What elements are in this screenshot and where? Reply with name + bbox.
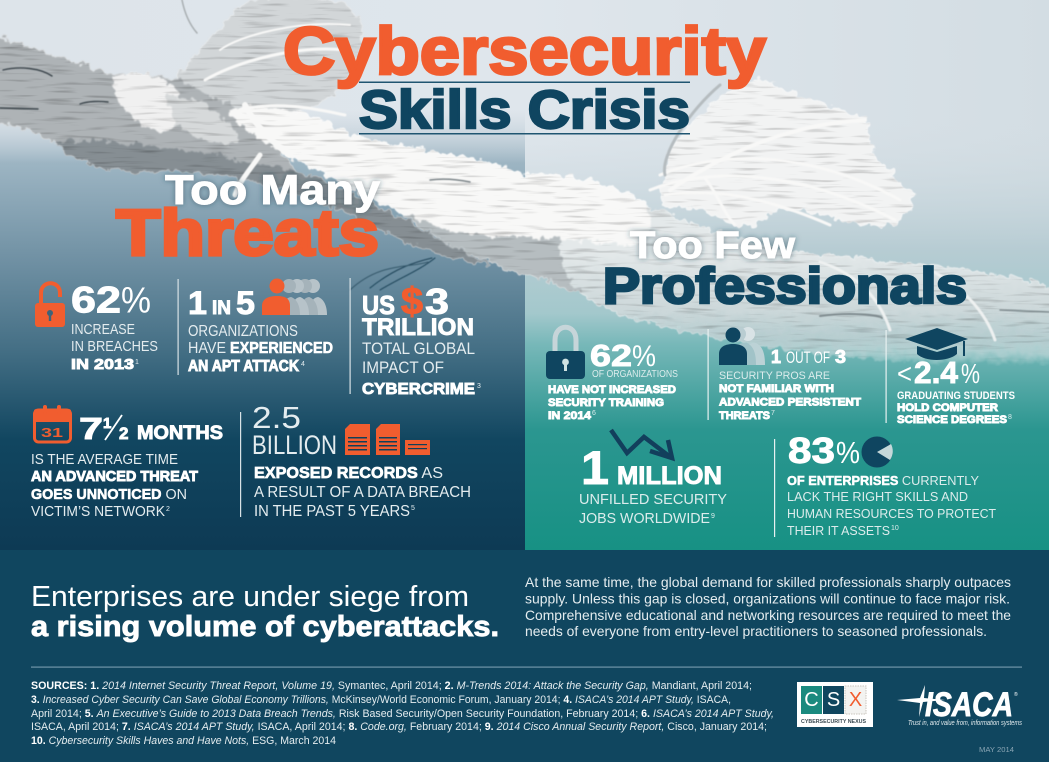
stat: 7 1/2 months: IS THE AVERAGE TIME (31, 451, 178, 468)
stat: 83% of enterprises: LACK THE RIGHT SKILLS AND (787, 489, 968, 504)
logo: ISACA: ISACA (925, 686, 1013, 724)
stat: 7 1/2 months: AN ADVANCED THREAT (31, 468, 198, 485)
stat: 7 1/2 months: GOES UNNOTICED ON (31, 486, 187, 503)
stat: 62% increase in breaches: % (121, 280, 151, 320)
heading: Too Few Professionals: Too Few (630, 225, 795, 267)
icon: document records (345, 424, 430, 455)
bottom band (0, 550, 1049, 762)
icon: closed padlock (546, 327, 585, 379)
stat: 62% increase in breaches: INCREASE (71, 321, 135, 338)
stat: 83% of enterprises: % (836, 435, 860, 470)
stat: 1 out of 3 security pros: NOT FAMILIAR WITH (719, 383, 834, 395)
headline: enterprises under siege: a rising volume of cyberattacks. (31, 611, 499, 643)
stat: under 2.4% graduating students: 2.4 (914, 355, 959, 390)
stat: US $3 trillion: CYBERCRIME (362, 381, 475, 398)
stat: 7 1/2 months: 7 (79, 411, 103, 446)
stat: 83% of enterprises: THEIR IT ASSETS (787, 523, 890, 538)
logo: CSX Cybersecurity Nexus: X (849, 689, 862, 711)
stat: 1 out of 3 security pros: OUT OF (786, 348, 830, 367)
icon: pie chart (862, 436, 893, 468)
icon: falling arrow (611, 430, 672, 458)
stat: 83% of enterprises: HUMAN RESOURCES TO PROTECT (787, 506, 996, 521)
icon: people (719, 327, 765, 365)
stat: US $3 trillion: $ (401, 281, 423, 323)
stat: US $3 trillion: TOTAL GLOBAL (362, 339, 475, 358)
date: MAY 2014 (979, 745, 1014, 754)
paragraph: global demand (525, 574, 1011, 639)
stat: 1 in 5 organizations: AN APT ATTACK (188, 358, 300, 375)
stat: under 2.4% graduating students: 8 (1008, 414, 1012, 421)
background: right professionals panel (525, 120, 1049, 550)
stat: US $3 trillion: US (362, 290, 395, 320)
stat: 2.5 billion exposed records: A RESULT OF A DATA BREACH (254, 484, 471, 501)
stat: 1 out of 3 security pros: SECURITY PROS ARE (719, 370, 830, 382)
title line: Skills Crisis: Skills Crisis (359, 80, 690, 140)
stat: US $3 trillion: TRILLION (362, 314, 474, 341)
stat: 1 in 5 organizations: HAVE EXPERIENCED (188, 340, 333, 357)
heading: Too Many Threats (116, 166, 381, 269)
stat: 62% of organizations: % (632, 340, 656, 373)
stat: 1 out of 3 security pros: 3 (835, 347, 846, 367)
title (283, 14, 766, 140)
stat: 1 out of 3 security pros: 7 (771, 410, 775, 417)
stat: under 2.4% graduating students: SCIENCE DEGREES (897, 414, 1007, 426)
stat: US $3 trillion (362, 281, 481, 398)
heading: Too Few Professionals: Professionals (603, 258, 967, 314)
stat: 83% of enterprises: OF ENTERPRISES CURRENTLY (787, 473, 979, 488)
stat: 2.5 billion exposed records: IN THE PAST 5 YEARS (254, 503, 410, 520)
stat: US $3 trillion: 3 (425, 281, 449, 322)
logo: ISACA (897, 685, 1022, 727)
sources list: SOURCES: 1. 2014 Internet Security Threat Report, Volume 19, Symantec, April 2014; 2. M-Trends 2014: Attack the Security Gap, Mandiant, April 2014; (31, 680, 752, 692)
stat: 2.5 billion exposed records: 5 (411, 505, 415, 512)
stat: 1 out of 3 security pros: 1 (771, 347, 781, 367)
sources list: 10. Cybersecurity Skills Haves and Have Nots, ESG, March 2014 (31, 735, 336, 747)
stat: 62% of organizations: 62 (590, 338, 632, 373)
stat: 1 in 5 organizations: 5 (236, 285, 255, 321)
heading: Too Many Threats: Threats (116, 196, 379, 269)
icon: open padlock (35, 283, 65, 327)
stat: 7 1/2 months: 1 (103, 415, 111, 432)
stat: 1 million unfilled jobs: MILLION (617, 462, 722, 490)
stat: 62% increase in breaches (35, 280, 158, 373)
logo: CSX Cybersecurity Nexus: S (827, 689, 840, 711)
stat: US $3 trillion: 3 (477, 383, 481, 390)
stat: 2.5 billion exposed records: BILLION (252, 430, 337, 460)
stat: 1 in 5 organizations (188, 278, 333, 375)
title line: Cybersecurity: Cybersecurity (283, 14, 766, 89)
sources list: 3. Increased Cyber Security Can Save Global Economy Trillions, McKinsey/World Economic Forum, January 2014; 4. ISACA’s 2014 APT Study, ISACA, (31, 694, 731, 706)
paragraph: global demand: needs of everyone from entry-level practitioners to seasoned professionals. (525, 623, 987, 639)
stat: 1 in 5 organizations: 1 (188, 285, 207, 321)
logo: CSX Cybersecurity Nexus (797, 682, 873, 727)
stat: 62% of organizations (546, 327, 678, 422)
stat: under 2.4% graduating students (897, 328, 1015, 426)
stat: 2.5 billion exposed records: EXPOSED RECORDS AS (254, 465, 443, 482)
logo: CSX Cybersecurity Nexus: CYBERSECURITY NEXUS (801, 719, 866, 725)
stat: 62% of organizations: OF ORGANIZATIONS (592, 369, 678, 380)
stat: 1 in 5 organizations: 4 (301, 361, 305, 368)
stat: under 2.4% graduating students: < (897, 358, 912, 389)
background: left threats panel (0, 110, 525, 550)
stat: 2.5 billion exposed records (252, 400, 471, 520)
sources list: ISACA, April 2014; 7. ISACA’s 2014 APT Study, ISACA, April 2014; 8. Code.org, February 2014; 9. 2014 Cisco Annual Security Report, Cisco, January 2014; (31, 721, 767, 733)
background: sky (0, 0, 1049, 560)
logo: ISACA: ® (1014, 691, 1018, 698)
logo: CSX Cybersecurity Nexus: C (804, 689, 819, 711)
stat: 1 out of 3 security pros: ADVANCED PERSISTENT (719, 396, 861, 408)
stat: 1 million unfilled jobs: 1 (581, 441, 609, 494)
frayed rope photo (0, 0, 1049, 366)
stat: under 2.4% graduating students: HOLD COMPUTER (897, 402, 998, 414)
stat: 7 1/2 months (31, 405, 223, 520)
stat: 7 1/2 months: 2 (119, 424, 128, 443)
stat: 1 million unfilled jobs (579, 430, 727, 527)
icon: calendar (34, 405, 71, 442)
stat: 83% of enterprises: 10 (891, 525, 899, 532)
headline: enterprises under siege (31, 581, 499, 643)
stat: 62% increase in breaches: 1 (135, 359, 139, 366)
paragraph: global demand: supply. Unless this gap is closed, organizations will continue to face major risk. (525, 590, 1010, 606)
stat: US $3 trillion: IMPACT OF (362, 358, 444, 377)
stat: under 2.4% graduating students: % (961, 358, 980, 389)
stat: 7 1/2 months: MONTHS (137, 423, 223, 444)
paragraph: global demand: At the same time, the global demand for skilled professionals sharply outpaces (525, 574, 1011, 590)
stat: 62% of organizations: 6 (592, 410, 596, 417)
stat: 1 million unfilled jobs: UNFILLED SECURITY (579, 491, 727, 508)
stat: 7 1/2 months: VICTIM’S NETWORK (31, 503, 165, 520)
heading: Too Many Threats: Too Many (165, 166, 381, 213)
heading: Too Few Professionals (603, 225, 967, 314)
stat: 83% of enterprises (787, 430, 996, 538)
stat: 1 out of 3 security pros: THREATS (719, 410, 770, 422)
stat: 62% increase in breaches: IN 2013 (71, 356, 134, 373)
stat: 62% increase in breaches: IN BREACHES (71, 338, 158, 355)
stat: 62% of organizations: IN 2014 (548, 410, 592, 422)
stat: 62% of organizations: HAVE NOT INCREASED (548, 384, 676, 396)
stat: 1 in 5 organizations: ORGANIZATIONS (188, 323, 298, 340)
sources list (31, 680, 774, 747)
stat: 7 1/2 months: 2 (166, 506, 170, 513)
stat: under 2.4% graduating students: GRADUATING STUDENTS (897, 390, 1015, 402)
stat: 83% of enterprises: 83 (788, 430, 835, 471)
stat: 62% increase in breaches: 62 (71, 280, 121, 320)
sources list: April 2014; 5. An Executive’s Guide to 2013 Data Breach Trends, Risk Based Security/Open Security Foundation, February 2014; 6. ISACA’s 2014 APT Study, (31, 708, 774, 720)
stat: 1 out of 3 security pros (719, 327, 861, 422)
stat: 1 million unfilled jobs: 9 (711, 513, 715, 520)
headline: enterprises under siege: Enterprises are under siege from (31, 581, 469, 613)
stat: 1 million unfilled jobs: JOBS WORLDWIDE (579, 510, 710, 527)
icon: graduation cap (905, 328, 968, 360)
stat: 62% of organizations: SECURITY TRAINING (548, 397, 664, 409)
stat: 2.5 billion exposed records: 2.5 (252, 400, 301, 435)
icon: calendar: 31 (41, 425, 63, 440)
icon: row of people (262, 278, 327, 315)
stat: 1 in 5 organizations: IN (212, 298, 231, 319)
paragraph: global demand: Comprehensive educational and networking resources are required to meet the (525, 607, 1011, 623)
